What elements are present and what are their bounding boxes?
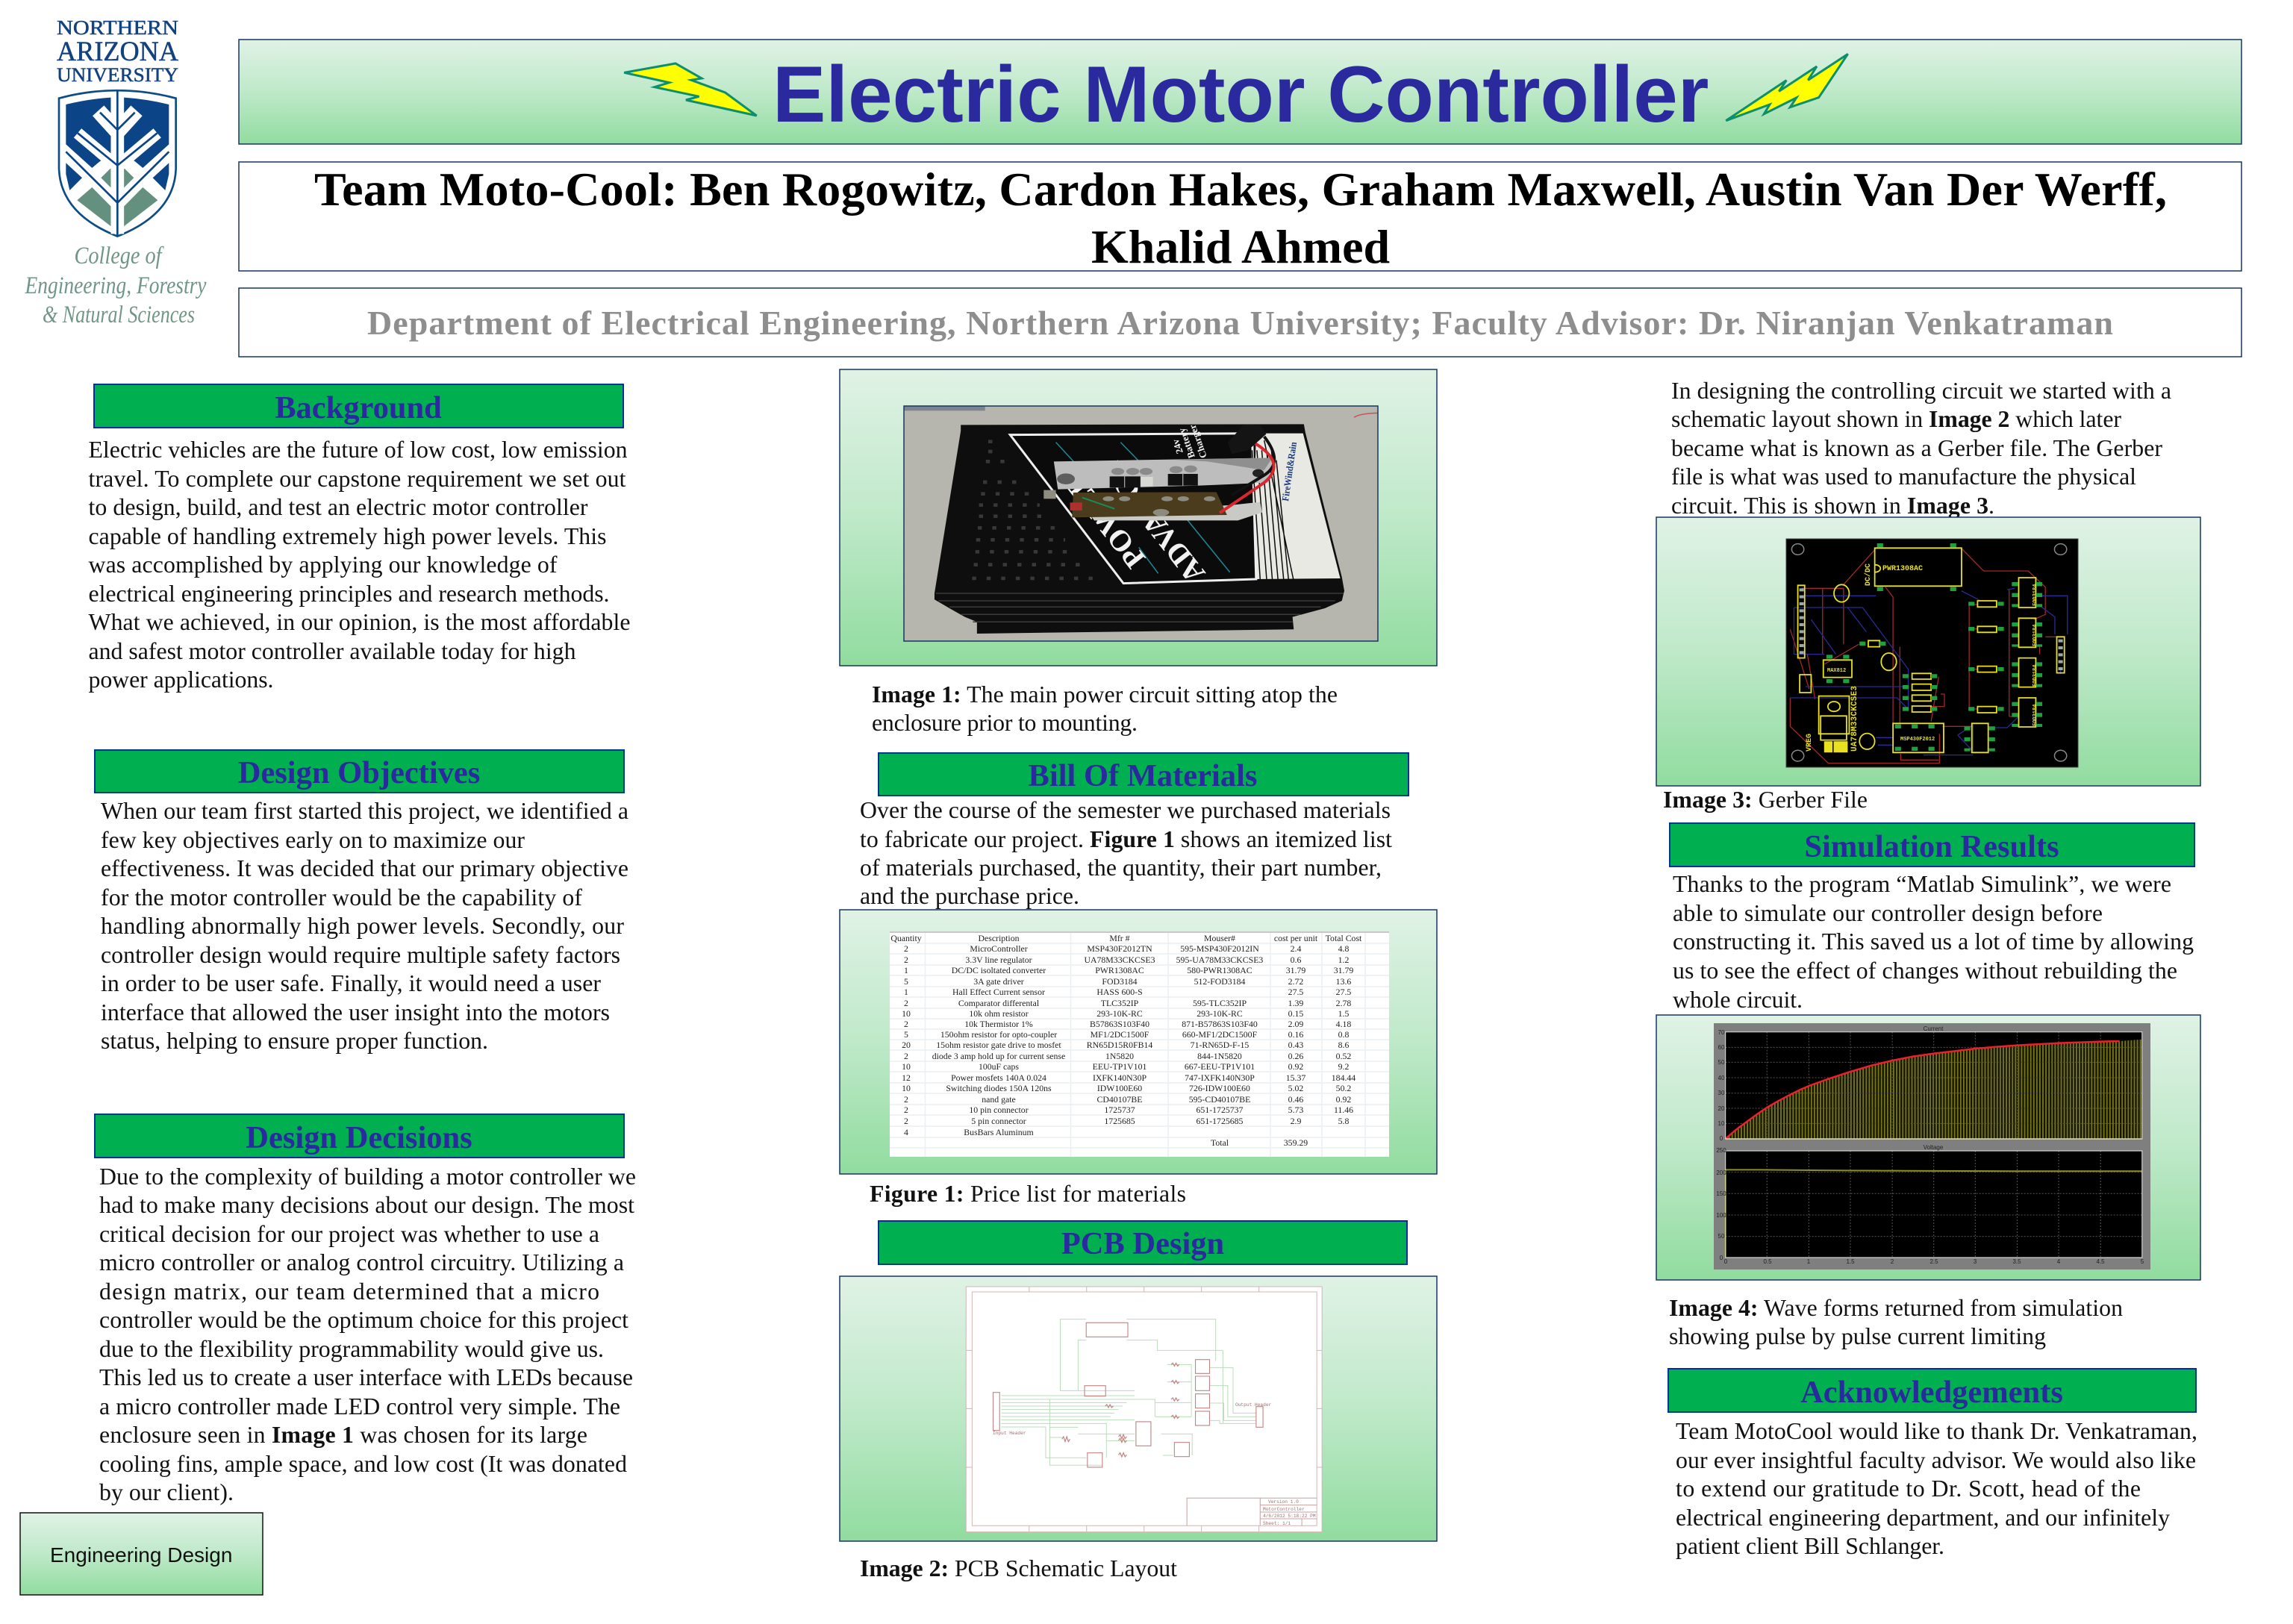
table: price list: 184.44 <box>1332 1072 1355 1083</box>
table: price list: 20 <box>902 1040 911 1050</box>
table: price list: 0.92 <box>1288 1061 1303 1072</box>
panel: pcb design <box>879 1221 1407 1264</box>
text: background: What we achieved, in our opinion, is the most affordable <box>88 609 630 635</box>
heading: bill of materials: Bill Of Materials <box>1029 758 1257 793</box>
schematic title block text: 4/6/2012 5:18:22 PM <box>1263 1514 1316 1519</box>
caption: image 4 <box>1669 1295 2123 1349</box>
panel: image 1 enclosure photo <box>840 369 1437 666</box>
table: price list: 871-B57863S103F40 <box>1182 1019 1258 1029</box>
scope axis labels: 10 <box>1718 1120 1725 1127</box>
text: design objectives: few key objectives early on to maximize our <box>101 827 525 853</box>
table: price list: 844-1N5820 <box>1197 1051 1242 1061</box>
photo lettering <box>1067 425 1206 579</box>
schematic title block text: Sheet: 1/1 <box>1263 1521 1291 1526</box>
table: price list: 2.78 <box>1336 998 1351 1008</box>
table: price list: 0.15 <box>1288 1008 1303 1019</box>
college name <box>25 243 207 328</box>
text: design decisions: design matrix, our team determined that a micro <box>99 1278 599 1305</box>
table: price list: 27.5 <box>1336 987 1351 997</box>
text: background: power applications. <box>88 666 273 693</box>
panel: image 2 schematic <box>840 1276 1437 1541</box>
table: price list: 595-TLC352IP <box>1193 998 1247 1008</box>
table: price list: Mfr # <box>1109 933 1130 943</box>
text: design decisions: controller would be the optimum choice for this project <box>99 1307 628 1333</box>
table: price list: 2.72 <box>1288 976 1303 987</box>
scope axis labels: 0 <box>1720 1255 1723 1261</box>
table: price list: 27.5 <box>1288 987 1303 997</box>
schematic drawing <box>966 1287 1322 1532</box>
table: price list: 5.73 <box>1288 1105 1303 1115</box>
table: price list: 31.79 <box>1334 965 1353 975</box>
heading: pcb design: PCB Design <box>1061 1226 1224 1261</box>
table: price list: nand gate <box>982 1094 1016 1105</box>
table: price list: 1.39 <box>1288 998 1303 1008</box>
text: simulation results: us to see the effect of changes without rebuilding the <box>1673 958 2177 984</box>
panel: figure 1 price table <box>840 910 1437 1174</box>
badge: engineering design <box>20 1513 263 1595</box>
table: price list: 2 <box>904 955 908 965</box>
heading: background: Background <box>275 390 442 425</box>
logo: Northern Arizona University <box>25 16 207 328</box>
table: price list: 15ohm resistor gate drive to mosfet <box>936 1040 1061 1050</box>
table: price list: 10k ohm resistor <box>969 1008 1029 1019</box>
table: price list: PWR1308AC <box>1095 965 1144 975</box>
table: price list: RN65D15R0FB14 <box>1087 1040 1152 1050</box>
table: price list: 747-IXFK140N30P <box>1185 1072 1255 1083</box>
gerber pcb board <box>1786 539 2078 767</box>
table: price list: UA78M33CKCSE3 <box>1084 955 1155 965</box>
scope axis labels: 4.5 <box>2096 1258 2105 1265</box>
schematic title block text: Version 1.0 <box>1268 1499 1299 1505</box>
table: price list: 660-MF1/2DC1500F <box>1182 1029 1258 1040</box>
table: price list: 512-FOD3184 <box>1194 976 1246 987</box>
table: price list: 0.16 <box>1288 1029 1303 1040</box>
heading: design objectives: Design Objectives <box>238 755 480 790</box>
text: background: and safest motor controller available today for high <box>88 638 576 664</box>
scope axis labels: 40 <box>1718 1075 1725 1081</box>
panel: image 3 gerber <box>1656 517 2200 786</box>
table: price list: Comparator differental <box>958 998 1040 1008</box>
table: price list: 2 <box>904 1019 908 1029</box>
logo shield <box>59 90 176 237</box>
logo wordmark: UNIVERSITY <box>57 64 178 86</box>
table: price list: 1.2 <box>1338 955 1349 965</box>
title text: Electric Motor Controller <box>773 49 1709 139</box>
text: background: Electric vehicles are the future of low cost, low emission <box>88 437 628 463</box>
scope axis labels: 50 <box>1718 1059 1725 1066</box>
panel: acknowledgements <box>1668 1369 2197 1559</box>
text: acknowledgements: our ever insightful faculty advisor. We would also like <box>1676 1447 2196 1473</box>
photo lettering: POWER <box>1055 465 1152 575</box>
text: background: to design, build, and test an electric motor controller <box>88 494 588 520</box>
text: design decisions: enclosure seen in Image 1 was chosen for its large <box>99 1422 587 1448</box>
table: price list: 2.9 <box>1291 1116 1301 1126</box>
photo lettering: Battery <box>1176 426 1197 460</box>
text: design decisions: Due to the complexity of building a motor controller we <box>99 1164 636 1190</box>
table: price list: 2 <box>904 943 908 954</box>
text: simulation results <box>1673 871 2194 1013</box>
table: price list: 1 <box>904 965 908 975</box>
table: price list: CD40107BE <box>1097 1094 1142 1105</box>
photo lettering: 24v <box>1170 437 1185 455</box>
table: price list: Hall Effect Current sensor <box>952 987 1045 997</box>
table: price list: 13.6 <box>1336 976 1351 987</box>
table: price list: 293-10K-RC <box>1197 1008 1243 1019</box>
table: price list: BusBars Aluminum <box>964 1127 1034 1137</box>
table: price list: 293-10K-RC <box>1096 1008 1143 1019</box>
simulation scope plot <box>1714 1023 2150 1269</box>
team names box <box>239 162 2241 273</box>
schematic title block text: Output Header <box>1235 1402 1272 1408</box>
text: design decisions: cooling fins, ample space, and low cost (It was donated <box>99 1451 627 1477</box>
table: price list: Power mosfets 140A 0.024 <box>951 1072 1046 1083</box>
schematic title block text: Input Header <box>993 1431 1026 1436</box>
text: bill of materials: and the purchase price. <box>860 883 1079 909</box>
gerber silkscreen labels: FOD3184 <box>2032 665 2038 687</box>
text: design objectives: status, helping to ensure proper function. <box>101 1028 488 1054</box>
table: price list: 2.4 <box>1291 943 1301 954</box>
heading: acknowledgements: Acknowledgements <box>1800 1375 2063 1410</box>
scope axis labels: Voltage <box>1924 1144 1944 1151</box>
badge: engineering design: Engineering Design <box>50 1543 232 1567</box>
table: price list: 100uF caps <box>979 1061 1019 1072</box>
scope axis labels: Current <box>1924 1025 1944 1032</box>
panel: design objectives <box>95 750 628 1054</box>
table: price list: 8.6 <box>1338 1040 1349 1050</box>
text: design objectives: handling abnormally high power levels. Secondly, our <box>101 913 624 939</box>
caption: image 3: Image 3: Gerber File <box>1663 787 1868 813</box>
text: gerber intro: file is what was used to manufacture the physical <box>1671 463 2136 490</box>
table: price list <box>890 931 1389 1157</box>
caption: image 4: Image 4: Wave forms returned from simulation <box>1669 1295 2123 1321</box>
text: simulation results: Thanks to the program “Matlab Simulink”, we were <box>1673 871 2171 897</box>
schematic title block text: MotorController <box>1263 1507 1305 1512</box>
gerber silkscreen labels: VREG <box>1806 734 1814 752</box>
table: price list: 150ohm resistor for opto-coupler <box>940 1029 1057 1040</box>
caption: image 2: Image 2: PCB Schematic Layout <box>860 1555 1177 1581</box>
team names box: Team Moto-Cool: Ben Rogowitz, Cardon Hakes, Graham Maxwell, Austin Van Der Werff, <box>314 163 2167 216</box>
table: price list: 10k Thermistor 1% <box>964 1019 1033 1029</box>
table: price list: 0.8 <box>1338 1029 1349 1040</box>
scope axis labels: 3.5 <box>2012 1258 2021 1265</box>
table: price list: 5.8 <box>1338 1116 1349 1126</box>
table: price list: 50.2 <box>1336 1083 1351 1093</box>
scope axis labels: 3 <box>1974 1258 1977 1265</box>
table: price list: 5 <box>904 1029 908 1040</box>
text: background: electrical engineering principles and research methods. <box>88 581 609 607</box>
table: price list: 1 <box>904 987 908 997</box>
table: price list: 5.02 <box>1288 1083 1303 1093</box>
table: price list: 5 <box>904 976 908 987</box>
scope axis labels: 20 <box>1718 1105 1725 1112</box>
table: price list: 10 <box>902 1008 911 1019</box>
panel: simulation results <box>1670 823 2194 1013</box>
text: gerber intro: circuit. This is shown in Image 3. <box>1671 493 1994 519</box>
text: design objectives: in order to be user safe. Finally, it would need a user <box>101 970 601 996</box>
table: price list: 0.26 <box>1288 1051 1303 1061</box>
caption: image 4: showing pulse by pulse current limiting <box>1669 1323 2046 1349</box>
table: price list: IDW100E60 <box>1097 1083 1142 1093</box>
table: price list: 5 pin connector <box>971 1116 1026 1126</box>
icon: right lightning bolt <box>1726 54 1848 121</box>
title banner <box>239 40 2241 144</box>
text: acknowledgements: patient client Bill Schlanger. <box>1676 1533 1944 1559</box>
text: bill of materials <box>860 797 1392 909</box>
table: price list: 667-EEU-TP1V101 <box>1185 1061 1255 1072</box>
text: design objectives: effectiveness. It was decided that our primary objective <box>101 855 628 881</box>
text: bill of materials: Over the course of the semester we purchased materials <box>860 797 1391 823</box>
text: design decisions: by our client). <box>99 1479 234 1505</box>
table: price list: 4.18 <box>1336 1019 1351 1029</box>
table: price list: Total Cost <box>1326 933 1362 943</box>
scope axis labels: 4 <box>2057 1258 2061 1265</box>
gerber silkscreen labels: FOD3184 <box>2032 625 2038 646</box>
college name: & Natural Sciences <box>43 302 195 328</box>
table: price list: 12 <box>902 1072 911 1083</box>
table: price list: 3A gate driver <box>973 976 1024 987</box>
table: price list: 651-1725737 <box>1197 1105 1244 1115</box>
scope axis labels: 0.5 <box>1763 1258 1772 1265</box>
text: bill of materials: to fabricate our project. Figure 1 shows an itemized list <box>860 826 1392 852</box>
scope axis labels: 30 <box>1718 1090 1725 1096</box>
schematic title block text <box>993 1402 1316 1526</box>
gerber silkscreen labels: MAX812 <box>1827 668 1846 674</box>
scope axis labels: 0 <box>1724 1258 1728 1265</box>
gerber silkscreen labels: DC/DC <box>1864 563 1873 586</box>
text: design objectives: When our team first started this project, we identified a <box>101 798 628 824</box>
team names box: Khalid Ahmed <box>1091 220 1390 273</box>
text: design decisions: This led us to create a user interface with LEDs because <box>99 1364 633 1390</box>
text: design objectives: controller design would require multiple safety factors <box>101 942 620 968</box>
scope axis labels: 50 <box>1718 1233 1725 1240</box>
text: design decisions: had to make many decisions about our design. The most <box>99 1192 634 1218</box>
table: price list: 2 <box>904 1051 908 1061</box>
text: design decisions <box>99 1164 636 1505</box>
text: design decisions: due to the flexibility programmability would give us. <box>99 1336 604 1362</box>
text: simulation results: whole circuit. <box>1673 987 1803 1013</box>
text: background: capable of handling extremely high power levels. This <box>88 523 606 549</box>
table: price list: 1N5820 <box>1105 1051 1134 1061</box>
panel: background <box>88 384 630 693</box>
college name: College of <box>75 243 164 269</box>
text: design objectives <box>101 798 628 1054</box>
scope axis labels <box>1716 1025 2144 1265</box>
gerber silkscreen labels <box>1806 563 2038 752</box>
gerber silkscreen labels: MSP430F2012 <box>1900 737 1935 743</box>
scope axis labels: 2.5 <box>1929 1258 1938 1265</box>
table: price list: 0.43 <box>1288 1040 1303 1050</box>
caption: figure 1: Figure 1: Price list for materials <box>870 1181 1186 1207</box>
department box <box>239 288 2241 357</box>
table: price list: 2 <box>904 1105 908 1115</box>
table: price list: IXFK140N30P <box>1093 1072 1146 1083</box>
scope axis labels: 70 <box>1718 1029 1725 1036</box>
table: price list: 595-MSP430F2012IN <box>1180 943 1259 954</box>
table: price list: 10 pin connector <box>969 1105 1029 1115</box>
table: price list: MF1/2DC1500F <box>1091 1029 1149 1040</box>
table: price list: 15.37 <box>1286 1072 1305 1083</box>
table: price list: B57863S103F40 <box>1090 1019 1149 1029</box>
panel: bill of materials <box>860 753 1408 909</box>
table: price list: 595-UA78M33CKCSE3 <box>1176 955 1263 965</box>
table: price list: DC/DC isoltated converter <box>952 965 1046 975</box>
table: price list: 1725685 <box>1104 1116 1135 1126</box>
photo circuit assembly <box>1043 424 1274 520</box>
text: simulation results: able to simulate our controller design before <box>1673 900 2103 926</box>
table: price list: 9.2 <box>1338 1061 1349 1072</box>
table: price list: Description <box>978 933 1020 943</box>
table: price list: 651-1725685 <box>1197 1116 1244 1126</box>
logo wordmark <box>57 16 178 86</box>
scope axis labels: 1.5 <box>1846 1258 1855 1265</box>
gerber silkscreen labels: PWR1308AC <box>1882 565 1923 573</box>
heading: design decisions: Design Decisions <box>246 1120 472 1155</box>
text: design objectives: for the motor controller would be the capability of <box>101 884 582 911</box>
text: design decisions: a micro controller made LED control very simple. The <box>99 1393 620 1420</box>
table: price list: Mouser# <box>1204 933 1235 943</box>
table: price list: 10 <box>902 1083 911 1093</box>
table: price list: FOD3184 <box>1102 976 1138 987</box>
table: price list: 3.3V line regulator <box>965 955 1032 965</box>
table: price list: 2.09 <box>1288 1019 1303 1029</box>
table: price list: diode 3 amp hold up for current sense <box>932 1051 1065 1061</box>
table: price list: TLC352IP <box>1101 998 1139 1008</box>
photo: power circuit on enclosure <box>904 406 1379 641</box>
scope axis labels: 0 <box>1720 1135 1723 1142</box>
text: acknowledgements: Team MotoCool would like to thank Dr. Venkatraman, <box>1676 1418 2197 1444</box>
table: price list: 0.92 <box>1336 1094 1351 1105</box>
table: price list: 10 <box>902 1061 911 1072</box>
gerber silkscreen labels: FOD3184 <box>2032 705 2038 726</box>
table: price list: Switching diodes 150A 120ns <box>946 1083 1052 1093</box>
photo lettering: ADVANCE <box>1096 455 1211 590</box>
table: price list: Total <box>1211 1137 1229 1148</box>
text: bill of materials: of materials purchased, the quantity, their part number, <box>860 855 1382 881</box>
table: price list: 0.6 <box>1291 955 1301 965</box>
table: price list: 4 <box>904 1127 908 1137</box>
table: price list: 2 <box>904 998 908 1008</box>
scope axis labels: 60 <box>1718 1044 1725 1051</box>
heading: simulation results: Simulation Results <box>1804 829 2059 864</box>
logo wordmark: NORTHERN <box>57 16 178 39</box>
scope axis labels: 200 <box>1716 1169 1726 1176</box>
text: acknowledgements: to extend our gratitude to Dr. Scott, head of the <box>1676 1475 2141 1502</box>
table: price list: 4.8 <box>1338 943 1349 954</box>
department box: Department of Electrical Engineering, Northern Arizona University; Faculty Advisor: Dr. Niranjan Venkatraman <box>367 304 2113 342</box>
text: design decisions: micro controller or analog control circuitry. Utilizing a <box>99 1249 624 1275</box>
scope axis labels: 2 <box>1891 1258 1894 1265</box>
scope axis labels: 1 <box>1807 1258 1811 1265</box>
scope axis labels: 100 <box>1716 1212 1726 1219</box>
text: acknowledgements: electrical engineering department, and our infinitely <box>1676 1505 2170 1531</box>
table: price list: 2 <box>904 1094 908 1105</box>
table: price list: 359.29 <box>1284 1137 1308 1148</box>
gerber silkscreen labels: FOD3184 <box>2032 584 2038 606</box>
table: price list: 1725737 <box>1104 1105 1135 1115</box>
table: price list: cost per unit <box>1274 933 1318 943</box>
text: design decisions: critical decision for our project was whether to use a <box>99 1221 599 1247</box>
table: price list: 595-CD40107BE <box>1189 1094 1250 1105</box>
scope axis labels: 5 <box>2141 1258 2144 1265</box>
table: price list: HASS 600-S <box>1096 987 1143 997</box>
photo brand label: FireWind&Rain <box>1279 440 1299 502</box>
table: price list: MSP430F2012TN <box>1087 943 1152 954</box>
text: acknowledgements <box>1676 1418 2197 1559</box>
panel: image 4 waveforms <box>1656 1015 2200 1280</box>
text: gerber intro: schematic layout shown in Image 2 which later <box>1671 406 2121 432</box>
text: gerber intro: became what is known as a Gerber file. The Gerber <box>1671 435 2162 461</box>
table: price list: 2 <box>904 1116 908 1126</box>
photo lettering: Charger <box>1187 423 1209 460</box>
table: price list: 31.79 <box>1286 965 1305 975</box>
text: background: travel. To complete our capstone requirement we set out <box>88 466 626 492</box>
scope axis labels: 250 <box>1716 1147 1726 1154</box>
logo wordmark: ARIZONA <box>57 37 178 67</box>
table: price list: 11.46 <box>1334 1105 1353 1115</box>
gerber silkscreen labels: UA78M33CKCSE3 <box>1850 686 1859 752</box>
caption: image 1 <box>872 681 1338 736</box>
table: price list: EEU-TP1V101 <box>1093 1061 1146 1072</box>
college name: Engineering, Forestry <box>25 272 207 299</box>
scope axis labels: 150 <box>1716 1190 1726 1197</box>
table: price list: 580-PWR1308AC <box>1187 965 1252 975</box>
caption: image 1: enclosure prior to mounting. <box>872 710 1138 736</box>
text: gerber intro: In designing the controlling circuit we started with a <box>1671 378 2171 404</box>
text: simulation results: constructing it. This saved us a lot of time by allowing <box>1673 928 2194 955</box>
table: price list: 71-RN65D-F-15 <box>1191 1040 1249 1050</box>
text: design objectives: interface that allowed the user insight into the motors <box>101 999 610 1025</box>
caption: image 1: Image 1: The main power circuit sitting atop the <box>872 681 1338 708</box>
table: price list: 0.52 <box>1336 1051 1351 1061</box>
text: gerber intro <box>1671 378 2171 519</box>
table: price list: Quantity <box>890 933 922 943</box>
panel: design decisions <box>95 1114 636 1505</box>
table: price list: MicroController <box>970 943 1028 954</box>
icon: left lightning bolt <box>624 63 757 116</box>
table: price list: 0.46 <box>1288 1094 1303 1105</box>
table: price list: 726-IDW100E60 <box>1189 1083 1250 1093</box>
table: price list: 1.5 <box>1338 1008 1349 1019</box>
text: background: was accomplished by applying our knowledge of <box>88 552 558 578</box>
text: background <box>88 437 630 693</box>
